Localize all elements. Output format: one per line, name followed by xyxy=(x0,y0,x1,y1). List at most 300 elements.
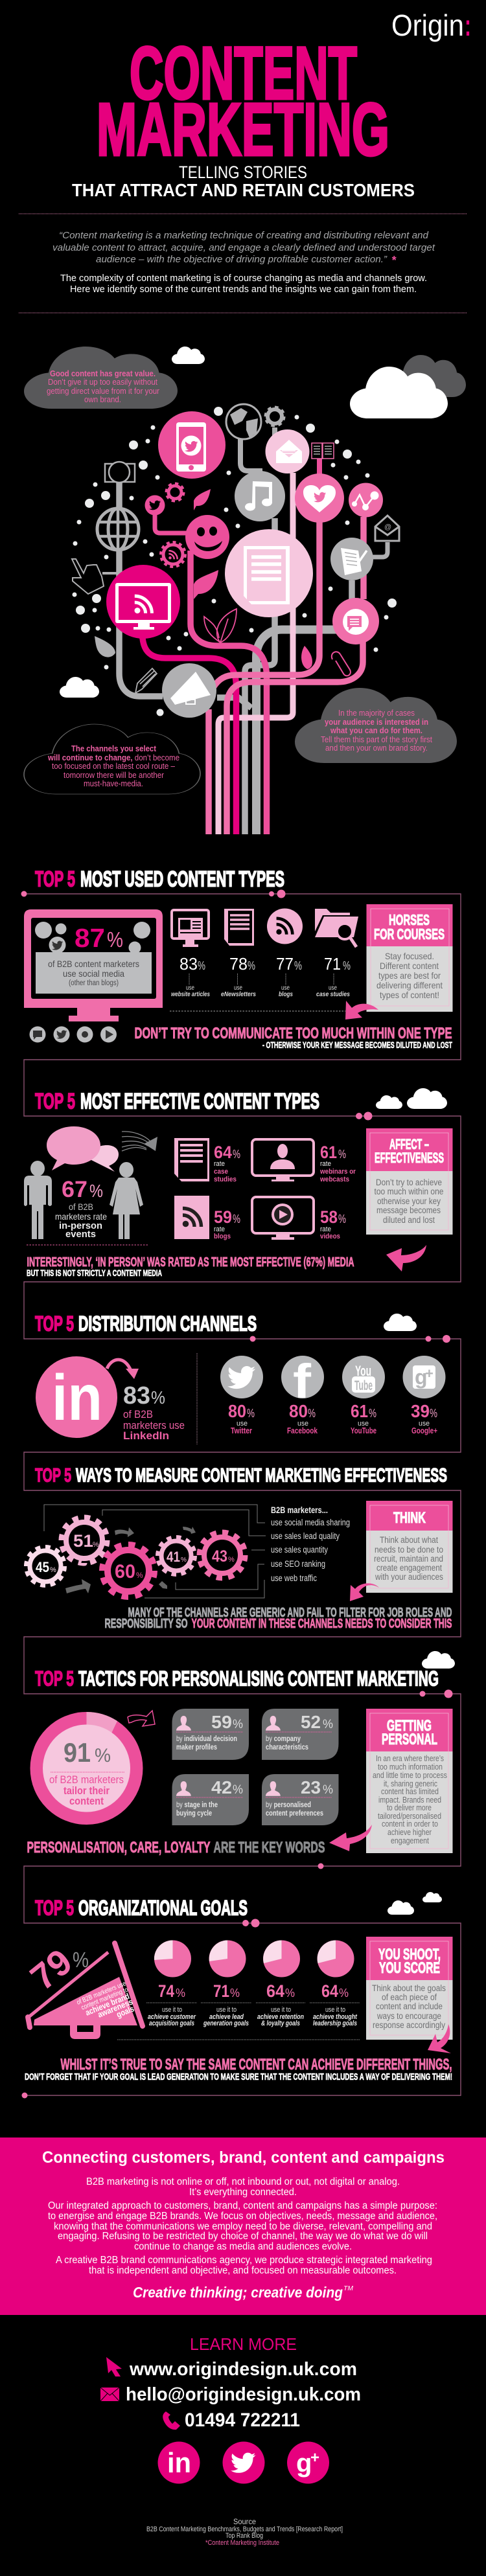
tree illustration xyxy=(72,404,399,834)
megaphone: 79%: % xyxy=(73,1948,89,1972)
gear 45 xyxy=(27,1547,64,1585)
gear 41: 41 xyxy=(167,1549,180,1565)
panel: horses for courses: types of content! xyxy=(380,990,439,1000)
panel: getting personal: tailored/personalised xyxy=(378,1812,441,1821)
social: google plus: g xyxy=(296,2449,312,2478)
panel: connecting customers: Our integrated approach to customers, brand, content and campaigns has a simple purpose: xyxy=(48,2200,437,2211)
icon: rss gear xyxy=(161,543,185,566)
panel: affect effectiveness xyxy=(366,1128,452,1235)
donut: 91% xyxy=(30,1712,143,1825)
stat: 58 videos: 58 xyxy=(320,1207,338,1227)
panel: you shoot you score: Think about the goals xyxy=(372,1983,446,1993)
stat: 77 blogs: % xyxy=(294,959,302,972)
pie: 64 retention loyalty: achieve retention xyxy=(257,2013,304,2021)
list: B2B marketers: use sales quantity xyxy=(271,1545,328,1555)
channel: facebook: f xyxy=(293,1354,311,1408)
panel: connecting customers xyxy=(0,2137,486,2315)
panel: affect effectiveness: otherwise your key xyxy=(377,1196,441,1206)
card: company characteristics: 52 xyxy=(301,1712,321,1732)
callout: many of the channels: RESPONSIBILITY SO xyxy=(105,1617,188,1631)
pie: 71 lead generation xyxy=(201,1941,251,2027)
card: buying cycle: by stage in the xyxy=(176,1800,218,1809)
stat: 67 in-person: of B2B xyxy=(69,1202,93,1212)
megaphone: 79%: content marketing to xyxy=(80,1986,130,2012)
stat: 83 linkedin: LinkedIn xyxy=(123,1430,169,1442)
panel: affect effectiveness: AFFECT – xyxy=(389,1136,429,1152)
panel: connecting customers: that is independent and objective, and focused on measurable outcomes. xyxy=(89,2265,397,2276)
pie: 64 retention loyalty: 64 xyxy=(266,1981,284,2001)
pie: 74 customer acquisition: achieve customer xyxy=(148,2013,196,2021)
card: individual decision: maker profiles xyxy=(176,1742,217,1751)
dotted divider xyxy=(196,1353,198,1444)
quote: “Content marketing is a marketing technique of creating and distributing relevant and xyxy=(59,230,429,241)
contact: phone: 01494 722211 xyxy=(185,2410,300,2431)
panel: connecting customers: to energise and engage B2B brands. We focus on objectives, needs, message and audience, xyxy=(48,2211,437,2222)
quote: valuable content to attract, acquire, and engage a clearly defined and understood target xyxy=(52,242,435,253)
heading: distribution channels xyxy=(35,1312,257,1336)
contact: email: hello@origindesign.uk.com xyxy=(126,2384,361,2405)
panel: horses for courses: HORSES xyxy=(389,911,430,928)
learn more: LEARN MORE xyxy=(190,2334,297,2354)
icon: pencil xyxy=(135,668,157,693)
heading: organizational goals: TOP 5 xyxy=(35,1897,74,1920)
source: B2B Content Marketing Benchmarks, Budgets and Trends [Research Report] xyxy=(146,2525,343,2533)
connector lines xyxy=(44,1505,266,1598)
icon: hand cursor xyxy=(72,559,104,594)
icon: monitor article xyxy=(172,910,209,947)
list: B2B marketers: use web traffic xyxy=(271,1573,317,1583)
stat: 59 blogs: blogs xyxy=(214,1233,231,1240)
stat: 64 case studies: rate xyxy=(214,1160,225,1168)
heading: most effective content types: TOP 5 xyxy=(35,1089,75,1114)
heading: most effective content types: MOST EFFECTIVE CONTENT TYPES xyxy=(80,1089,319,1114)
heading: distribution channels: TOP 5 xyxy=(35,1312,74,1336)
gear 41 xyxy=(158,1538,194,1574)
quote: * xyxy=(391,254,397,267)
contact: website: www.origindesign.uk.com xyxy=(129,2359,357,2380)
pie: 71 lead generation: use it to xyxy=(216,2006,237,2014)
stat: 61 webinars: webinars or xyxy=(319,1168,356,1176)
stat: 61 webinars xyxy=(319,1143,356,1183)
cloud: good content xyxy=(24,347,178,409)
panel: you shoot you score: content and include xyxy=(376,2001,443,2011)
icon: big document circle xyxy=(225,529,313,617)
icon: case studies document xyxy=(174,1138,209,1181)
stat: 78 eNewsletters: use xyxy=(234,985,242,992)
section connector line xyxy=(24,894,461,2095)
white dots xyxy=(73,407,397,716)
gear 43: 43 xyxy=(212,1547,227,1566)
channel: google plus xyxy=(403,1356,446,1435)
channel: twitter: 80 xyxy=(228,1401,246,1421)
pie: 64 retention loyalty: % xyxy=(285,1987,295,2000)
stat: 67 in-person: 67 xyxy=(62,1177,87,1202)
icon: pink gear xyxy=(167,484,183,501)
panel: getting personal: it, sharing generic xyxy=(384,1779,437,1788)
gear 43 xyxy=(200,1533,245,1578)
cloud: outlined channels: must-have-media. xyxy=(84,779,143,788)
icon: rss monitor circle xyxy=(106,565,180,639)
list: B2B marketers: use sales lead quality xyxy=(271,1531,340,1541)
panel: connecting customers: knowing that the communications we employ need to be diverse, relevant, compelling and xyxy=(54,2221,432,2232)
panel: affect effectiveness: message becomes xyxy=(376,1205,441,1215)
megaphone: 79%: awareness xyxy=(97,1997,134,2020)
icon: document xyxy=(224,909,254,946)
donut: 91%: 91 xyxy=(64,1737,91,1768)
panel: think: Think about what xyxy=(380,1535,438,1545)
icon: woman xyxy=(110,1162,143,1239)
panel: horses for courses: Different content xyxy=(380,961,439,971)
panel: getting personal xyxy=(366,1709,452,1853)
stat: 59 blogs xyxy=(214,1207,240,1240)
stat: 61 webinars: webcasts xyxy=(319,1176,349,1183)
heading: most used content types: TOP 5 xyxy=(35,867,75,891)
tree stems xyxy=(102,427,388,834)
icon: webinar monitor xyxy=(252,1139,314,1181)
icon: swoosh arrow xyxy=(122,1132,157,1151)
panel: connecting customers: TM xyxy=(343,2285,354,2292)
icon: leaf xyxy=(194,489,211,510)
monitor: social media 87%: of B2B content marketers xyxy=(48,959,139,969)
icon: megaphone circle xyxy=(162,663,216,718)
pie: 64 retention loyalty: & loyalty goals xyxy=(261,2020,300,2027)
icon: linkedin circle: in xyxy=(52,1362,102,1434)
stat: 64 case studies: % xyxy=(233,1148,240,1161)
cloud xyxy=(384,1314,417,1331)
stat: 83 website articles: 83 xyxy=(179,954,198,974)
callout: key words: PERSONALISATION, CARE, LOYALTY xyxy=(27,1839,210,1856)
panel: getting personal: GETTING xyxy=(387,1717,432,1735)
source: Top Rank Blog xyxy=(226,2532,263,2540)
pie: 71 lead generation: achieve lead xyxy=(209,2013,244,2021)
icon: smiley xyxy=(185,515,229,559)
icon: rss square xyxy=(174,1196,209,1239)
title xyxy=(97,32,389,171)
heading: personalising: TOP 5 xyxy=(35,1667,74,1691)
panel: getting personal: to deliver more xyxy=(387,1803,432,1812)
source: *Content Marketing Institute xyxy=(205,2539,279,2547)
icon: email at sign xyxy=(375,516,399,541)
callout: interestingly: BUT THIS IS NOT STRICTLY A CONTENT MEDIA xyxy=(27,1268,162,1278)
stat: 71 case studies: case studies xyxy=(316,991,350,998)
panel: connecting customers: It’s everything connected. xyxy=(189,2187,297,2198)
quote: audience – with the objective of driving profitable customer action.” xyxy=(96,254,388,265)
panel: connecting customers: A creative B2B brand communications agency, we produce strategic integrated marketing xyxy=(56,2255,432,2266)
icon: twitter small circle xyxy=(145,495,165,516)
dashed divider xyxy=(27,1244,149,1246)
monitor: social media 87%: 87 xyxy=(75,923,105,953)
dotted divider xyxy=(117,2039,360,2040)
gear 43: % xyxy=(228,1556,235,1564)
channel: twitter: % xyxy=(247,1407,255,1420)
stat: 71 case studies: % xyxy=(343,959,351,972)
megaphone: 79% xyxy=(23,1941,143,2039)
card: buying cycle xyxy=(172,1774,249,1825)
stat: 59 blogs: 59 xyxy=(214,1207,232,1227)
arrow: curved xyxy=(107,1360,139,1379)
stat: 83 linkedin: % xyxy=(151,1387,165,1408)
cloud: large white xyxy=(350,367,448,418)
panel: getting personal: content has limited xyxy=(381,1787,439,1796)
panel: horses for courses: delivering different xyxy=(376,980,443,990)
card: individual decision: by individual decision xyxy=(176,1734,237,1743)
cloud: audience xyxy=(295,688,457,763)
channel: google plus: use xyxy=(419,1420,430,1428)
panel: connecting customers: Creative thinking; creative doing xyxy=(133,2284,343,2301)
icon: gray leaf xyxy=(95,636,115,657)
cloud: audience: In the majority of cases xyxy=(338,708,415,718)
card: company characteristics: by company xyxy=(266,1734,301,1743)
pie: 64 thought leadership: % xyxy=(339,1987,349,2000)
logo: Origin: Origin xyxy=(391,8,464,42)
pie: 64 thought leadership: 64 xyxy=(321,1981,338,2001)
stat: 58 videos: videos xyxy=(320,1233,340,1240)
stat: 78 eNewsletters xyxy=(221,954,256,998)
channel: youtube: Tube xyxy=(354,1378,373,1393)
card: buying cycle: 42 xyxy=(211,1777,232,1797)
monitor: social media 87% xyxy=(24,909,163,1021)
card: individual decision: % xyxy=(233,1718,243,1731)
icon: email at sign: @ xyxy=(384,523,391,531)
card: content preferences: by personalised xyxy=(266,1800,311,1809)
icon: gray gear xyxy=(266,408,283,425)
card: company characteristics: % xyxy=(323,1718,333,1731)
callout: key words: ARE THE KEY WORDS xyxy=(214,1839,325,1856)
monitor: social media 87%: (other than blogs) xyxy=(69,979,119,987)
stat: 77 blogs: blogs xyxy=(279,991,293,998)
channel: facebook: use xyxy=(297,1420,308,1428)
icon: chat circle xyxy=(332,598,379,644)
channel: google plus: g xyxy=(415,1365,428,1389)
panel: getting personal: PERSONAL xyxy=(382,1731,437,1748)
stat: 78 eNewsletters: % xyxy=(248,959,255,972)
quote xyxy=(52,230,435,267)
heading: organizational goals xyxy=(35,1897,248,1920)
channel: facebook xyxy=(281,1354,324,1435)
megaphone: 79%: 79 xyxy=(23,1941,80,1998)
icon: camera xyxy=(105,462,135,483)
icon: smartphone circle xyxy=(158,411,226,479)
panel: horses for courses: FOR COURSES xyxy=(374,926,445,942)
icon: linkedin circle xyxy=(36,1356,117,1438)
icon: heart circle xyxy=(295,473,344,523)
panel: think: with your audiences xyxy=(375,1572,443,1582)
panel: getting personal: content in order to xyxy=(382,1819,438,1829)
card: content preferences xyxy=(262,1774,338,1825)
gear 51: % xyxy=(93,1541,99,1549)
cloud: outlined channels xyxy=(24,724,200,794)
pie: 74 customer acquisition: use it to xyxy=(162,2006,182,2014)
intro text: The complexity of content marketing is of course changing as media and channels grow. xyxy=(60,273,427,284)
card: buying cycle: % xyxy=(233,1783,243,1797)
stat: 71 case studies xyxy=(316,954,351,998)
channel: twitter xyxy=(220,1356,263,1435)
card: individual decision: 59 xyxy=(211,1712,232,1732)
gear 51: 51 xyxy=(73,1531,93,1551)
heading: distribution channels: DISTRIBUTION CHANNELS xyxy=(78,1312,257,1336)
gear 51 xyxy=(62,1518,107,1563)
title: CONTENT xyxy=(130,32,357,115)
callout: don't try xyxy=(135,1025,452,1050)
stat: 83 linkedin: of B2B xyxy=(123,1408,153,1420)
heading: most used content types: MOST USED CONTENT TYPES xyxy=(80,867,284,891)
panel: connecting customers: engaging. Refusing to be restricted by choice of channel, the way we do what we do will xyxy=(58,2231,428,2242)
channel: youtube: use xyxy=(358,1420,369,1428)
stat: 59 blogs: % xyxy=(233,1213,240,1225)
card: content preferences: % xyxy=(323,1783,333,1797)
panel: getting personal: too much information xyxy=(378,1762,443,1772)
panel: think: THINK xyxy=(393,1509,426,1527)
stat: 71 case studies: use xyxy=(329,985,337,992)
arrow xyxy=(329,1825,372,1851)
social: google plus xyxy=(287,2442,329,2483)
panel: you shoot you score: YOU SCORE xyxy=(379,1959,440,1977)
card: content preferences: 23 xyxy=(301,1777,321,1797)
panel: getting personal: impact. Brands need xyxy=(378,1795,441,1805)
donut: 91%: % xyxy=(95,1745,111,1766)
monitor: social media 87%: % xyxy=(107,928,123,952)
stat: 78 eNewsletters: eNewsletters xyxy=(221,991,256,998)
heading: ways to measure: TOP 5 xyxy=(35,1465,71,1486)
channel: twitter: Twitter xyxy=(231,1426,252,1435)
panel: think: create engagement xyxy=(376,1563,442,1573)
stat: 83 website articles: % xyxy=(198,959,205,972)
channel: facebook: % xyxy=(308,1407,316,1420)
stat: 61 webinars: % xyxy=(338,1148,346,1161)
list: B2B marketers: use SEO ranking xyxy=(271,1559,325,1569)
stat: 67 in-person xyxy=(55,1177,107,1240)
stat: 58 videos: rate xyxy=(320,1225,331,1233)
channel: google plus: 39 xyxy=(411,1401,430,1421)
pie: 74 customer acquisition: 74 xyxy=(158,1981,174,2001)
panel: affect effectiveness: diluted and lost xyxy=(383,1215,435,1225)
cloud: good content: own brand. xyxy=(84,394,121,404)
card: content preferences: content preferences xyxy=(266,1808,323,1818)
callout: interestingly xyxy=(27,1255,354,1278)
icon: music circle xyxy=(235,471,285,521)
panel: getting personal: engagement xyxy=(391,1836,429,1845)
pie: 71 lead generation: generation goals xyxy=(203,2020,249,2027)
pie: 64 thought leadership xyxy=(310,1941,360,2027)
cloud: small white lower xyxy=(60,677,99,698)
cloud: gray back xyxy=(391,355,466,397)
stat: 77 blogs xyxy=(276,954,302,998)
icon: share circle xyxy=(349,483,383,517)
stat: 83 website articles: use xyxy=(186,985,194,992)
subtitle: THAT ATTRACT AND RETAIN CUSTOMERS xyxy=(72,180,415,200)
channel: facebook: 80 xyxy=(289,1401,308,1421)
pie: 74 customer acquisition: acquisition goals xyxy=(149,2020,194,2027)
icon: document and pen circle xyxy=(330,538,373,580)
icon: leaf large xyxy=(194,570,218,599)
subtitle xyxy=(72,163,415,200)
channel: youtube: % xyxy=(369,1407,376,1420)
donut: 91%: tailor their xyxy=(64,1784,110,1797)
panel: affect effectiveness: too much within one xyxy=(375,1187,443,1196)
pie: 64 retention loyalty xyxy=(256,1941,305,2027)
arrow xyxy=(345,1001,378,1020)
panel: horses for courses xyxy=(367,904,452,1012)
panel: connecting customers: continue to change as media and audiences evolve. xyxy=(134,2241,352,2252)
stat: 78 eNewsletters: 78 xyxy=(229,954,248,974)
panel: getting personal: achieve higher xyxy=(388,1828,432,1837)
pie: 64 thought leadership: achieve thought xyxy=(313,2013,358,2021)
gear arrows xyxy=(65,1527,196,1593)
stat: 67 in-person: marketers rate xyxy=(55,1211,107,1222)
icon: wire globe xyxy=(97,508,139,550)
channel: facebook: Facebook xyxy=(287,1426,318,1435)
card: company characteristics xyxy=(262,1709,338,1760)
panel: you shoot you score xyxy=(366,1937,452,2040)
stat: 59 blogs: rate xyxy=(214,1225,225,1233)
source xyxy=(146,2517,343,2547)
list: B2B marketers xyxy=(271,1505,350,1583)
source: Source xyxy=(233,2517,256,2526)
gear 41: % xyxy=(181,1556,187,1564)
panel: you shoot you score: YOU SHOOT, xyxy=(378,1946,441,1963)
stat: 67 in-person: % xyxy=(89,1181,103,1201)
cloud: audience: your audience is interested in xyxy=(325,717,428,727)
stat: 67 in-person: events xyxy=(65,1229,96,1240)
channel: youtube: You xyxy=(355,1363,371,1379)
intro text: Here we identify some of the current trends and the insights we can gain from them. xyxy=(70,284,417,295)
stat: 64 case studies: case xyxy=(214,1168,228,1176)
list: B2B marketers: use social media sharing xyxy=(271,1518,350,1527)
clouds xyxy=(376,1088,447,1109)
card: company characteristics: characteristics xyxy=(266,1742,308,1751)
heading: most used content types xyxy=(35,867,284,891)
channel: youtube: 61 xyxy=(351,1401,368,1421)
connector dots xyxy=(21,890,452,2099)
divider xyxy=(19,213,467,214)
arrow: outline xyxy=(128,1711,155,1726)
gear 45: 45 xyxy=(36,1559,49,1575)
pie: 74 customer acquisition xyxy=(146,1940,197,2027)
cloud: good content: Don’t give it up too easily without xyxy=(48,377,157,387)
icon: paperclip xyxy=(332,652,351,676)
panel: think: recruit, maintain and xyxy=(374,1554,443,1564)
callout: many of the channels xyxy=(105,1606,452,1631)
pie: 71 lead generation: 71 xyxy=(213,1981,229,2001)
pie: 64 retention loyalty: use it to xyxy=(271,2006,291,2014)
icon: video monitor xyxy=(252,1197,314,1240)
channel: twitter: use xyxy=(237,1420,248,1428)
dashed divider xyxy=(170,1010,345,1012)
megaphone: 79%: goals xyxy=(115,2003,135,2020)
stat: 58 videos: % xyxy=(338,1213,346,1225)
channel: youtube xyxy=(342,1356,385,1435)
panel: think xyxy=(366,1501,452,1593)
panel: you shoot you score: ways to encourage xyxy=(376,2011,441,2021)
channel: google plus: Google+ xyxy=(411,1426,437,1435)
panel: think: needs to be done to xyxy=(375,1545,443,1555)
arrow xyxy=(428,2024,451,2053)
arrow xyxy=(386,1245,426,1271)
stat: 67 in-person: in-person xyxy=(59,1220,102,1231)
stat: 64 case studies xyxy=(214,1143,240,1183)
icon: envelope circle xyxy=(266,429,310,473)
pie: 71 lead generation: % xyxy=(230,1987,240,2000)
panel: you shoot you score: of each piece of xyxy=(382,1992,437,2002)
stat: 83 website articles xyxy=(171,954,210,998)
donut: 91%: content xyxy=(69,1795,104,1807)
stat: 83 linkedin: marketers use xyxy=(123,1419,185,1431)
monitor: social media 87%: use social media xyxy=(63,968,124,979)
pie: 74 customer acquisition: % xyxy=(176,1987,185,2000)
logo: Origin: : xyxy=(465,8,471,42)
cloud: audience: what you can do for them. xyxy=(330,725,422,735)
panel: connecting customers: Connecting customers, brand, content and campaigns xyxy=(42,2149,445,2167)
